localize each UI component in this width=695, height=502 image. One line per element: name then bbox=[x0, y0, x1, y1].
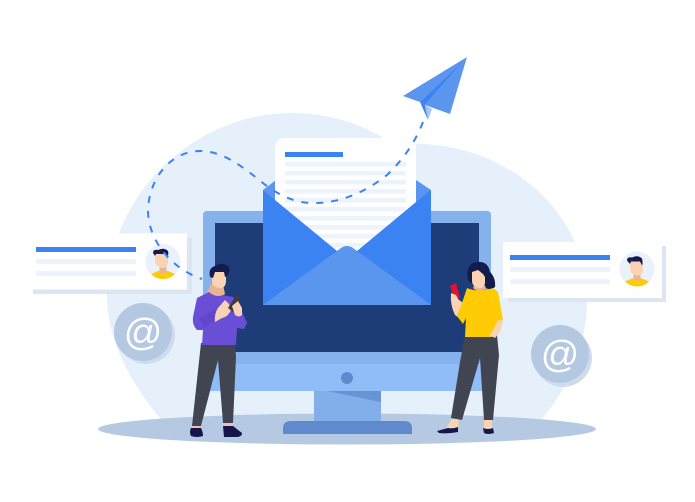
right contact card bbox=[503, 242, 666, 302]
ground ellipse bbox=[98, 414, 596, 444]
card body bbox=[503, 242, 662, 298]
woman pocket hand bbox=[489, 320, 503, 338]
woman ankles bbox=[446, 419, 492, 429]
woman neck and face bbox=[472, 270, 486, 291]
card shadow bbox=[33, 238, 192, 294]
left at-sign badge bbox=[114, 303, 175, 364]
envelope back flap bbox=[263, 180, 431, 260]
card lines bbox=[36, 247, 136, 276]
monitor bbox=[203, 211, 491, 434]
paper plane bbox=[403, 57, 467, 120]
avatar bbox=[146, 244, 180, 279]
woman phone bbox=[450, 283, 460, 299]
monitor power button bbox=[341, 372, 353, 384]
left contact card bbox=[33, 234, 192, 294]
monitor chin bbox=[203, 364, 491, 391]
man hair bbox=[210, 264, 230, 278]
woman raised arm bbox=[451, 293, 463, 318]
man sweater bbox=[193, 292, 247, 345]
woman with phone bbox=[437, 262, 503, 434]
monitor frame bbox=[203, 211, 491, 391]
envelope right panel bbox=[349, 190, 431, 305]
woman hair back bbox=[467, 262, 495, 289]
woman pants bbox=[451, 335, 499, 420]
envelope left panel bbox=[263, 190, 345, 305]
avatar bbox=[620, 252, 654, 286]
man phone hand bbox=[232, 301, 242, 316]
letter bbox=[275, 138, 416, 255]
letter text lines bbox=[285, 162, 406, 248]
card body bbox=[33, 234, 187, 290]
monitor screen bbox=[215, 223, 479, 352]
monitor stand bbox=[283, 391, 412, 434]
man socks bbox=[192, 423, 233, 429]
right at-sign badge bbox=[531, 325, 592, 387]
card shadow bbox=[508, 246, 666, 302]
card lines bbox=[510, 255, 610, 284]
man with phone bbox=[190, 264, 247, 437]
man phone bbox=[228, 294, 241, 312]
letter heading bar bbox=[285, 152, 343, 157]
man neck and face bbox=[207, 271, 226, 297]
envelope bottom flap bbox=[263, 246, 431, 305]
dashed flight path bbox=[148, 122, 423, 279]
woman sweater bbox=[457, 288, 503, 337]
left at-sign badge: @ bbox=[124, 312, 162, 354]
man left arm crease bbox=[199, 310, 219, 328]
man shoes bbox=[190, 426, 242, 437]
man hand bbox=[215, 300, 231, 322]
envelope bbox=[263, 138, 431, 305]
man legs bbox=[192, 343, 236, 426]
right at-sign badge: @ bbox=[541, 334, 579, 376]
background blob bbox=[107, 113, 587, 430]
woman shoes bbox=[437, 427, 494, 434]
